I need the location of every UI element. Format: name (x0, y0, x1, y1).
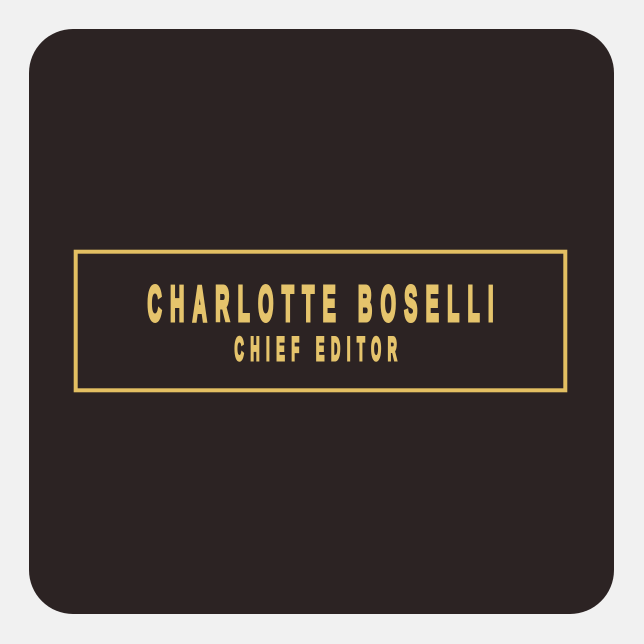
name heading: CHARLOTTE BOSELLI (148, 276, 494, 331)
gold frame (76, 252, 565, 390)
job title: CHIEF EDITOR (234, 332, 397, 368)
